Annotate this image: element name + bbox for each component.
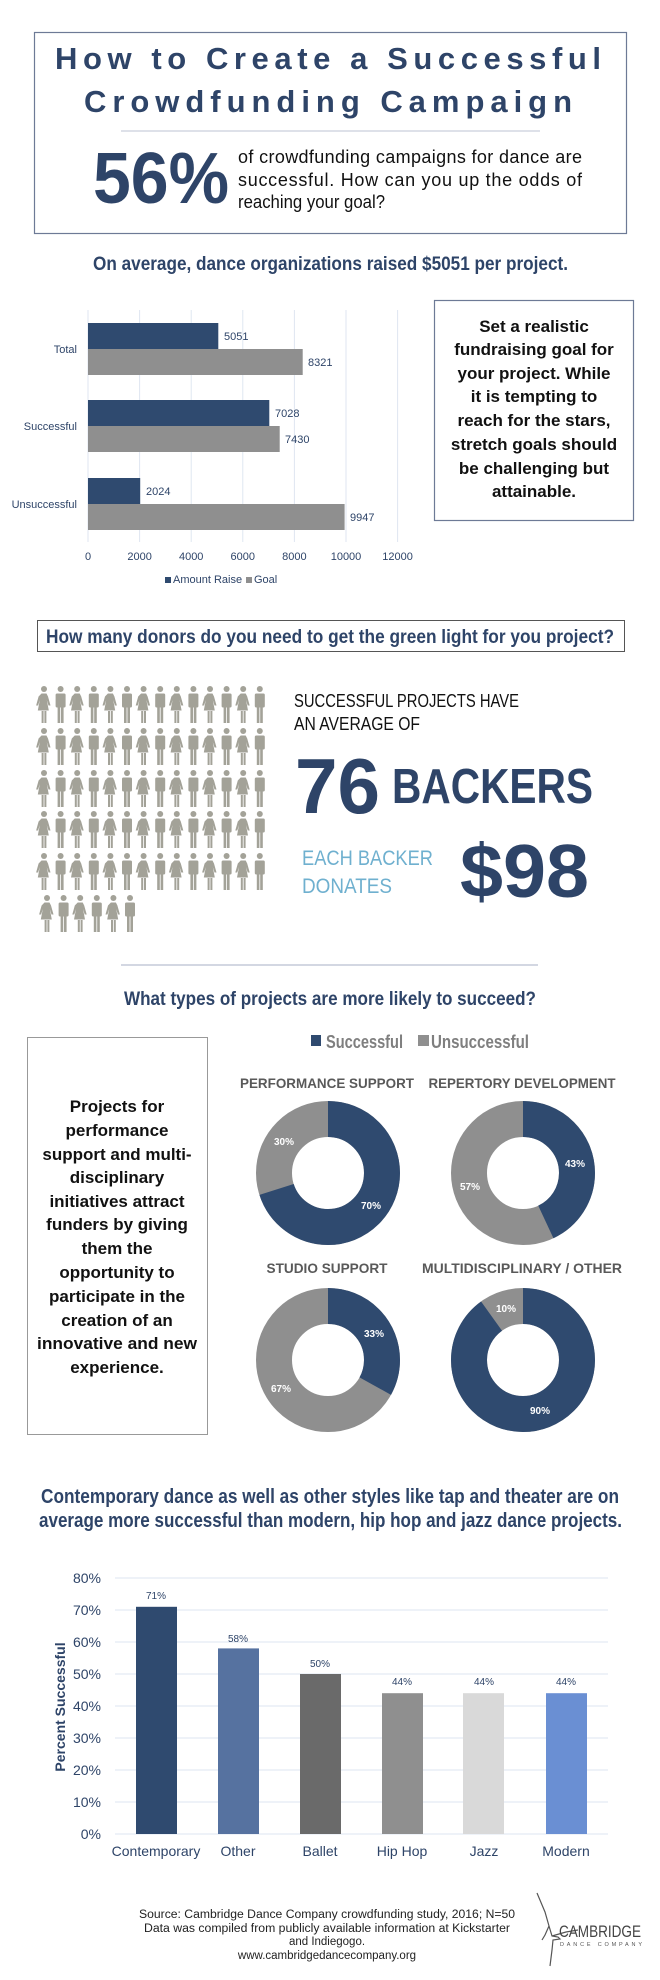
heading: project types: What types of projects are more likely to succeed? bbox=[124, 989, 536, 1010]
callout: performance support: them the bbox=[82, 1239, 152, 1258]
bar chart: success by style: 10% bbox=[73, 1794, 101, 1810]
bar chart: amount raised vs goal: 2000 bbox=[127, 551, 152, 563]
donut: multidisciplinary: MULTIDISCIPLINARY / OTHER bbox=[422, 1260, 622, 1276]
bar chart: success by style: Jazz bbox=[470, 1843, 498, 1859]
callout: performance support: participate in the bbox=[49, 1287, 185, 1306]
stat: backers: AN AVERAGE OF bbox=[294, 714, 420, 734]
callout: performance support: creation of an bbox=[61, 1311, 173, 1330]
donut: studio support: STUDIO SUPPORT bbox=[266, 1260, 388, 1276]
stat: donation per backer: $98 bbox=[460, 829, 589, 913]
stat: donation per backer: EACH BACKER bbox=[302, 847, 433, 870]
bar chart: success by style: 58% bbox=[228, 1634, 248, 1645]
stat: donation per backer bbox=[302, 829, 589, 913]
stat description bbox=[238, 147, 583, 212]
callout: performance support: innovative and new bbox=[37, 1334, 198, 1353]
legend bbox=[165, 574, 277, 586]
stat: backers bbox=[294, 691, 593, 830]
bar chart: success by style: 30% bbox=[73, 1730, 101, 1746]
stat description: successful. How can you up the odds of bbox=[238, 170, 583, 190]
bar chart: success by style bbox=[52, 1570, 608, 1859]
donut: studio support: 33% bbox=[364, 1329, 384, 1340]
bar chart: amount raised vs goal: 8321 bbox=[308, 357, 332, 369]
bar chart: success by style: 80% bbox=[73, 1570, 101, 1586]
source footer: Data was compiled from publicly available information at Kickstarter bbox=[144, 1923, 510, 1935]
bar chart: success by style: 20% bbox=[73, 1762, 101, 1778]
bar chart: amount raised vs goal: 4000 bbox=[179, 551, 203, 563]
bar chart: amount raised vs goal bbox=[12, 310, 413, 586]
bar chart: amount raised vs goal: 2024 bbox=[146, 486, 170, 498]
donut: repertory development bbox=[428, 1075, 616, 1227]
callout: realistic goal: stretch goals should bbox=[451, 435, 617, 454]
logo: Cambridge Dance Company: DANCE COMPANY bbox=[560, 1942, 642, 1948]
title: Crowdfunding Campaign bbox=[84, 84, 572, 119]
source footer: www.cambridgedancecompany.org bbox=[237, 1950, 416, 1962]
heading: dance styles bbox=[39, 1486, 622, 1532]
bar chart: success by style: 44% bbox=[392, 1677, 412, 1688]
callout: realistic goal: attainable. bbox=[492, 482, 576, 501]
callout: performance support: experience. bbox=[70, 1358, 164, 1377]
logo: Cambridge Dance Company: CAMBRIDGE bbox=[559, 1922, 641, 1941]
heading box: donors: How many donors do you need to get the green light for you project? bbox=[46, 627, 614, 648]
donut: studio support: 67% bbox=[271, 1384, 291, 1395]
title: How to Create a Successful bbox=[55, 41, 601, 76]
stat: donation per backer: DONATES bbox=[302, 875, 392, 898]
donut legend bbox=[311, 1032, 529, 1052]
callout: realistic goal: Set a realistic bbox=[479, 317, 589, 336]
source footer: Source: Cambridge Dance Company crowdfunding study, 2016; N=50 bbox=[139, 1909, 515, 1921]
donut: repertory development: 57% bbox=[460, 1182, 480, 1193]
callout: performance support: funders by giving bbox=[46, 1215, 188, 1234]
callout: realistic goal: it is tempting to bbox=[471, 387, 597, 406]
title panel bbox=[34, 32, 626, 234]
legend: Amount Raise bbox=[173, 574, 242, 586]
logo: Cambridge Dance Company bbox=[537, 1893, 642, 1966]
callout: realistic goal bbox=[434, 300, 634, 520]
donut: performance support: 30% bbox=[274, 1137, 294, 1148]
callout: performance support bbox=[28, 1038, 208, 1434]
source footer: and Indiegogo. bbox=[289, 1936, 365, 1948]
bar chart: amount raised vs goal: 7028 bbox=[275, 408, 299, 420]
donut: performance support bbox=[240, 1075, 414, 1227]
bar chart: success by style: Hip Hop bbox=[377, 1843, 427, 1859]
bar chart: success by style: 70% bbox=[73, 1602, 101, 1618]
donut: performance support: PERFORMANCE SUPPORT bbox=[240, 1075, 414, 1091]
bar chart: amount raised vs goal: Unsuccessful bbox=[12, 499, 77, 511]
heading: average raised: On average, dance organizations raised $5051 per project. bbox=[93, 254, 568, 275]
icon grid: 76 backers bbox=[36, 686, 265, 932]
bar chart: amount raised vs goal: Successful bbox=[24, 421, 77, 433]
callout: performance support: performance bbox=[66, 1121, 168, 1140]
donut: studio support bbox=[266, 1260, 388, 1414]
stat: 56%: 56% bbox=[93, 139, 229, 219]
bar chart: amount raised vs goal: 8000 bbox=[282, 551, 307, 563]
donut: multidisciplinary: 10% bbox=[496, 1304, 516, 1315]
stat description: of crowdfunding campaigns for dance are bbox=[238, 147, 582, 167]
callout: performance support: Projects for bbox=[70, 1097, 165, 1116]
callout: performance support: disciplinary bbox=[70, 1168, 165, 1187]
bar chart: amount raised vs goal: Total bbox=[54, 344, 77, 356]
bar chart: amount raised vs goal: 5051 bbox=[224, 331, 248, 343]
bar chart: success by style: 44% bbox=[474, 1677, 494, 1688]
bar chart: success by style: 50% bbox=[73, 1666, 101, 1682]
title bbox=[55, 41, 601, 119]
bar chart: success by style: Other bbox=[220, 1843, 256, 1859]
bar chart: success by style: 50% bbox=[310, 1659, 330, 1670]
bar chart: success by style: Percent Successful bbox=[52, 1642, 68, 1772]
bar chart: success by style: 0% bbox=[81, 1826, 101, 1842]
donut legend: Unsuccessful bbox=[431, 1032, 529, 1052]
callout: performance support: initiatives attract bbox=[49, 1192, 185, 1211]
bar chart: amount raised vs goal: 7430 bbox=[285, 434, 309, 446]
source footer bbox=[139, 1909, 515, 1962]
legend: Goal bbox=[254, 574, 277, 586]
bar chart: amount raised vs goal: 12000 bbox=[382, 551, 413, 563]
stat: backers: 76 bbox=[295, 742, 380, 830]
bar chart: success by style: 40% bbox=[73, 1698, 101, 1714]
donut legend: Successful bbox=[326, 1032, 403, 1052]
bar chart: success by style: 44% bbox=[556, 1677, 576, 1688]
bar chart: amount raised vs goal: 10000 bbox=[331, 551, 361, 563]
callout: performance support: opportunity to bbox=[59, 1263, 175, 1282]
bar chart: amount raised vs goal: 6000 bbox=[231, 551, 255, 563]
donut: repertory development: 43% bbox=[565, 1159, 585, 1170]
donut: multidisciplinary: 90% bbox=[530, 1406, 550, 1417]
heading box: donors bbox=[38, 620, 624, 652]
bar chart: success by style: Modern bbox=[542, 1843, 590, 1859]
bar chart: success by style: 71% bbox=[146, 1591, 166, 1602]
stat: backers: SUCCESSFUL PROJECTS HAVE bbox=[294, 691, 519, 711]
callout: realistic goal: be challenging but bbox=[459, 459, 609, 478]
callout: realistic goal: reach for the stars, bbox=[457, 411, 611, 430]
bar chart: amount raised vs goal: 9947 bbox=[350, 512, 374, 524]
bar chart: success by style: Contemporary bbox=[112, 1843, 200, 1859]
donut: repertory development: REPERTORY DEVELOPMENT bbox=[428, 1075, 616, 1091]
bar chart: success by style: Ballet bbox=[302, 1843, 338, 1859]
stat description: reaching your goal? bbox=[238, 192, 385, 212]
callout: performance support: support and multi- bbox=[42, 1145, 192, 1164]
donut: multidisciplinary bbox=[422, 1260, 622, 1417]
donut: performance support: 70% bbox=[361, 1201, 381, 1212]
bar chart: amount raised vs goal: 0 bbox=[85, 551, 91, 563]
bar chart: success by style: 60% bbox=[73, 1634, 101, 1650]
stat: backers: BACKERS bbox=[392, 760, 593, 814]
callout: realistic goal: fundraising goal for bbox=[454, 340, 614, 359]
callout: realistic goal: your project. While bbox=[457, 364, 611, 383]
